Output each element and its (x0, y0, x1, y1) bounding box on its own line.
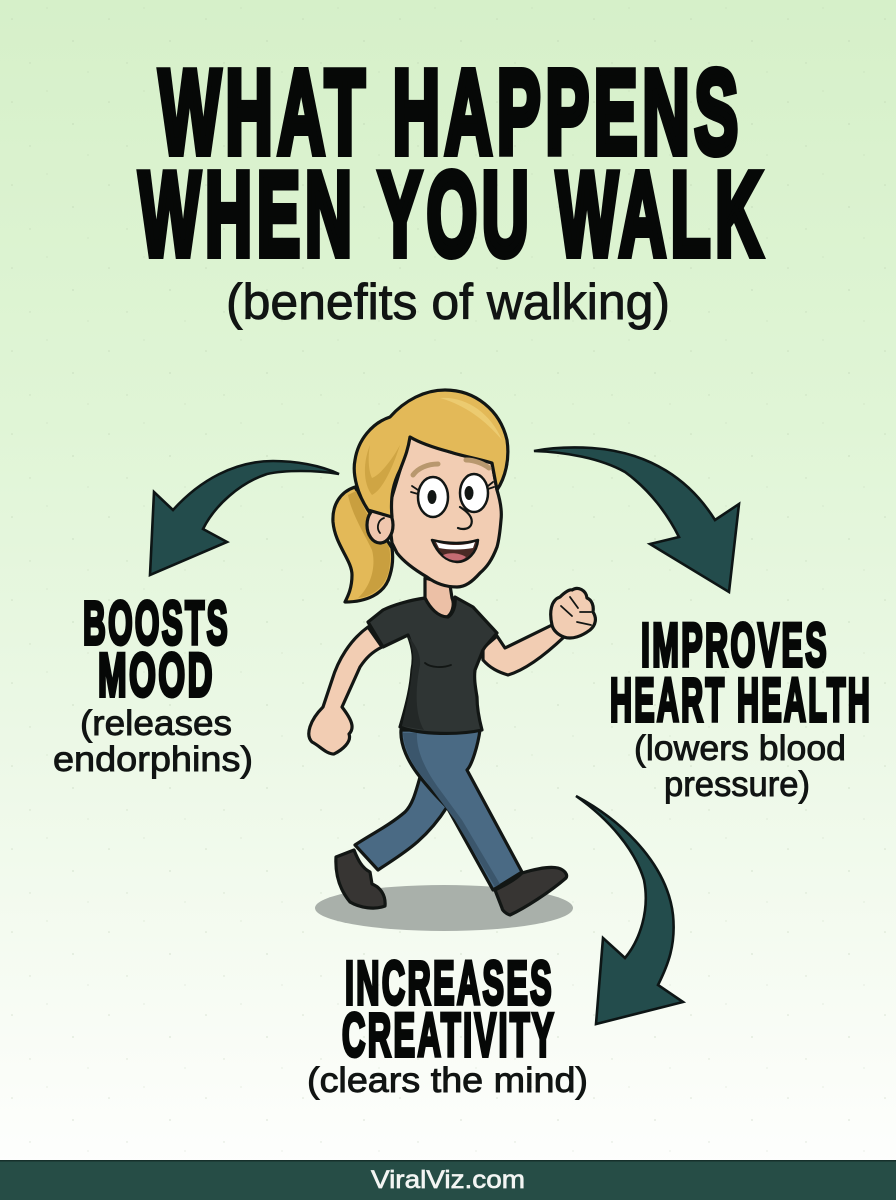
label: increases creativity: INCREASES (345, 949, 554, 1017)
label: boosts mood: endorphins) (53, 740, 253, 779)
ground shadow (315, 885, 573, 931)
front arm (483, 625, 564, 675)
mouth (432, 540, 478, 562)
subtitle: (benefits of walking) (226, 274, 670, 330)
t-shirt (368, 597, 497, 733)
face (388, 437, 501, 587)
eyes (411, 474, 494, 517)
arrow: to creativity (576, 796, 683, 1024)
hair (354, 390, 508, 517)
label: increases creativity (307, 949, 588, 1100)
label: improves heart health (610, 611, 872, 804)
label: improves heart health: pressure) (664, 765, 810, 804)
neck (425, 578, 453, 617)
label: increases creativity: CREATIVITY (342, 1001, 556, 1069)
label: boosts mood: BOOSTS (83, 589, 230, 657)
title (139, 46, 767, 281)
front leg (401, 730, 522, 890)
footer bar (0, 1160, 896, 1200)
footer bar: ViralViz.com (371, 1166, 525, 1194)
eyebrows (413, 460, 489, 475)
label: boosts mood: (releases (80, 704, 232, 743)
front shoe (495, 867, 567, 915)
label: boosts mood (53, 589, 253, 779)
ear (367, 507, 393, 543)
character: walking woman (309, 390, 595, 915)
trouser shading (403, 733, 500, 887)
ponytail (333, 487, 393, 602)
back shoe (336, 850, 385, 908)
label: improves heart health: (lowers blood (634, 729, 846, 768)
nose (458, 507, 472, 529)
arrow: to heart health (534, 447, 739, 592)
arrow: to boosts mood (150, 461, 339, 575)
label: boosts mood: MOOD (98, 641, 215, 709)
back arm (309, 627, 382, 754)
back leg (355, 777, 447, 870)
label: increases creativity: (clears the mind) (307, 1061, 588, 1100)
fist (551, 588, 595, 638)
